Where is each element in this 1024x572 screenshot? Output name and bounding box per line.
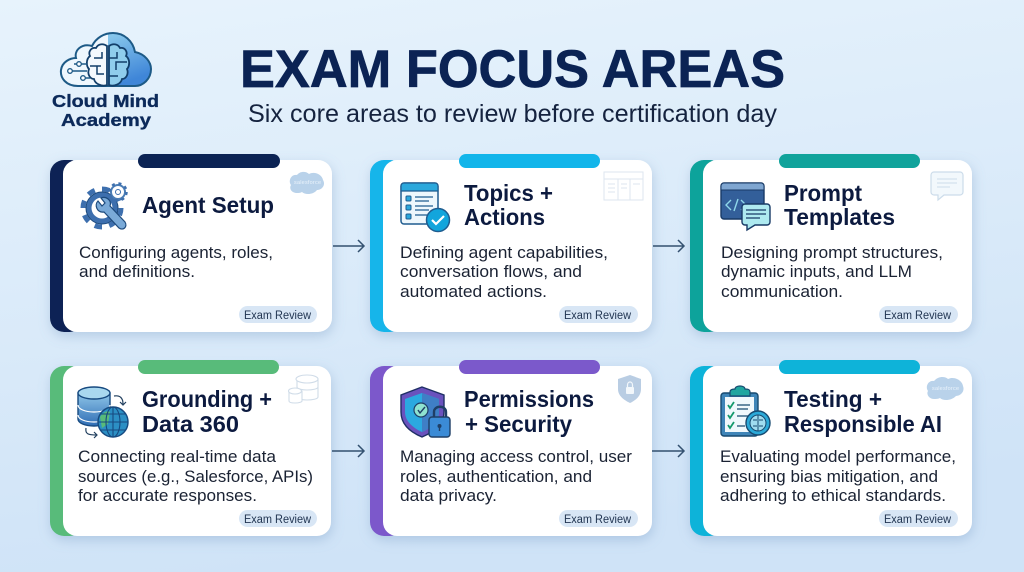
body text: Connecting real-time data [78, 447, 277, 466]
heading [464, 386, 594, 437]
panel: Grounding + Data 360 [50, 360, 331, 536]
panel: Topics + Actions [370, 154, 652, 332]
icon: checklist window [401, 183, 450, 232]
panel: Prompt Templates [690, 154, 972, 332]
body text: roles, authentication, and [400, 467, 592, 486]
body text: Managing access control, user [400, 447, 632, 466]
badge: Exam Review: Exam Review [884, 310, 952, 322]
body text: automated actions. [400, 282, 547, 301]
body text [721, 243, 943, 301]
arrow [652, 445, 684, 457]
body text: Designing prompt structures, [721, 243, 943, 262]
body text [78, 447, 313, 505]
body text [400, 447, 632, 505]
body text: and definitions. [79, 262, 195, 281]
heading: Topics + [464, 180, 553, 206]
heading: Actions [464, 204, 545, 230]
body text [79, 243, 273, 281]
body text [400, 243, 608, 301]
heading [464, 180, 553, 230]
subtitle: Six core areas to review before certification day [248, 100, 777, 128]
panel: Testing + Responsible AI [690, 360, 972, 536]
heading: Responsible AI [784, 411, 942, 437]
heading: Prompt [784, 180, 862, 206]
body text: adhering to ethical standards. [720, 486, 946, 505]
badge: Exam Review: Exam Review [884, 514, 952, 526]
panel: Agent Setup [50, 154, 332, 332]
heading: + Security [465, 411, 572, 437]
badge: Exam Review: Exam Review [564, 310, 632, 322]
watermark: salesforce cloud: salesforce [932, 386, 959, 392]
badge: Exam Review [239, 510, 317, 527]
body text: data privacy. [400, 486, 497, 505]
body text: Defining agent capabilities, [400, 243, 608, 262]
body text: sources (e.g., Salesforce, APIs) [78, 467, 313, 486]
watermark: table [604, 172, 643, 200]
body text: Configuring agents, roles, [79, 243, 273, 262]
badge: Exam Review [559, 306, 638, 323]
heading [784, 180, 895, 230]
body text: conversation flows, and [400, 262, 582, 281]
watermark: database stack [288, 375, 318, 403]
logo: Cloud Mind Academy: Academy [61, 110, 151, 130]
icon: gears and wrench [83, 184, 126, 229]
watermark: salesforce cloud [290, 172, 324, 194]
icon: database and globe [78, 387, 128, 438]
badge: Exam Review [879, 306, 958, 323]
badge: Exam Review: Exam Review [244, 514, 312, 526]
icon: shield and lock [401, 387, 450, 437]
badge: Exam Review: Exam Review [244, 310, 312, 322]
body text: communication. [721, 282, 843, 301]
heading: Data 360 [142, 411, 239, 437]
heading: Grounding + [142, 386, 272, 412]
heading [784, 386, 942, 437]
body text: dynamic inputs, and LLM [721, 262, 912, 281]
heading: Agent Setup [142, 192, 274, 218]
arrow [332, 445, 364, 457]
logo: Cloud Mind Academy: Cloud Mind [52, 91, 159, 111]
watermark: salesforce cloud: salesforce [294, 180, 321, 186]
icon: code window with speech bubble [721, 183, 770, 230]
icon: clipboard with brain [721, 386, 770, 436]
body text [720, 447, 956, 505]
badge: Exam Review: Exam Review [564, 514, 632, 526]
watermark: shield [618, 375, 641, 403]
arrow [653, 240, 684, 252]
heading: Testing + [784, 386, 882, 412]
panel: Permissions + Security [370, 360, 652, 536]
watermark: salesforce cloud [927, 377, 964, 400]
logo: Cloud Mind Academy [52, 33, 159, 130]
title: EXAM FOCUS AREAS [240, 40, 785, 99]
badge: Exam Review [239, 306, 317, 323]
heading [142, 386, 272, 437]
body text: Evaluating model performance, [720, 447, 956, 466]
watermark: chat bubble [931, 172, 963, 200]
arrow [333, 240, 364, 252]
badge: Exam Review [879, 510, 958, 527]
body text: for accurate responses. [78, 486, 257, 505]
heading: Permissions [464, 386, 594, 412]
body text: ensuring bias mitigation, and [720, 467, 938, 486]
heading: Templates [784, 204, 895, 230]
badge: Exam Review [559, 510, 638, 527]
